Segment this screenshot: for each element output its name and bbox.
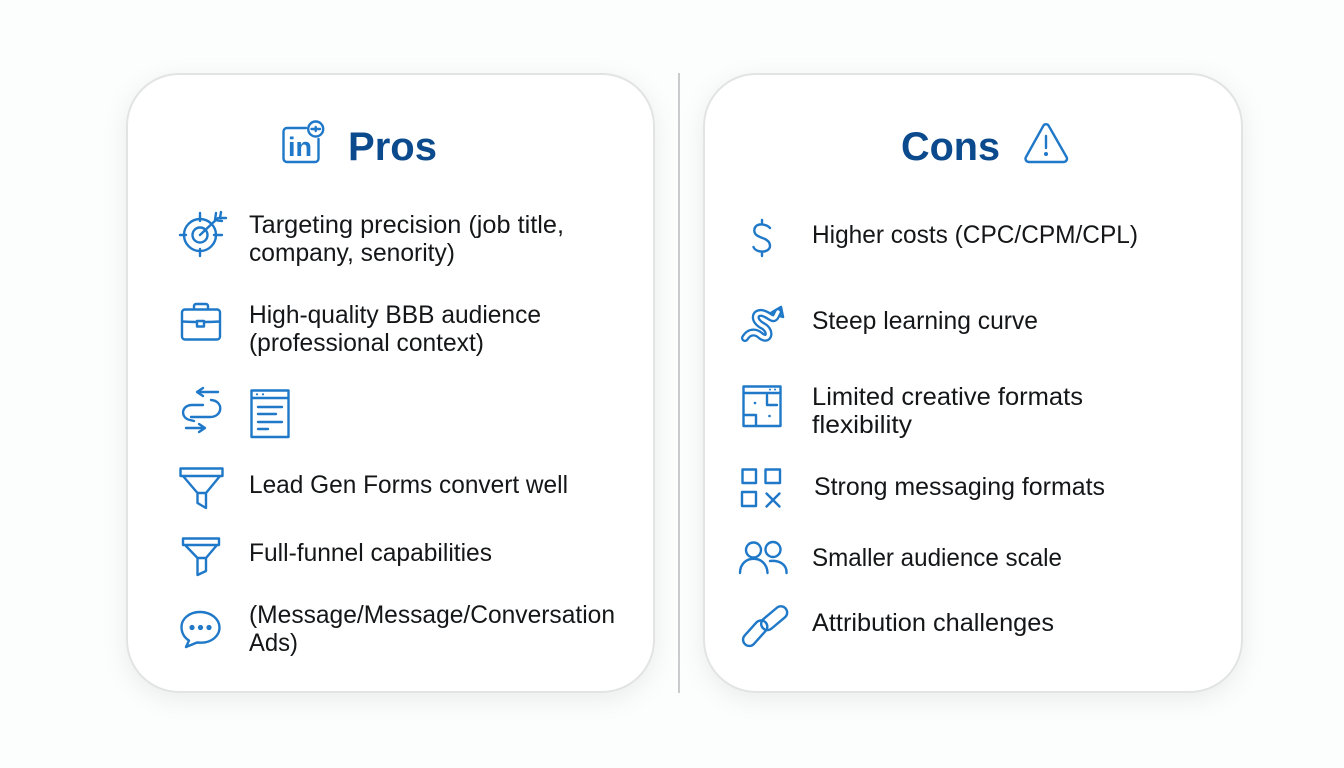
- icon: speech bubble: [182, 612, 220, 647]
- panel: cons: [704, 74, 1242, 692]
- icon: layout window: [744, 386, 780, 426]
- item: high-quality audience: (professional context): [249, 329, 484, 357]
- item: higher costs: [754, 220, 1138, 256]
- item: smaller audience scale: [740, 542, 1062, 573]
- item: steep learning curve: [745, 307, 1038, 338]
- icon: funnel large: [180, 468, 222, 508]
- text: attribution challenges: Attribution challenges: [812, 609, 1054, 637]
- text: high-quality audience: High-quality BBB audience: [249, 301, 541, 329]
- text: smaller audience scale: Smaller audience scale: [812, 544, 1062, 572]
- icon: briefcase: [182, 304, 220, 340]
- icon: chain link: [741, 604, 790, 648]
- item: limited creative formats: flexibility: [812, 411, 913, 439]
- icon: warning triangle: [1026, 124, 1067, 162]
- icon: funnel small: [183, 538, 219, 575]
- icon: people: [740, 542, 787, 573]
- center divider: [678, 73, 680, 693]
- text: higher costs: Higher costs (CPC/CPM/CPL): [812, 221, 1138, 249]
- heading: cons: Cons: [901, 125, 1000, 169]
- text: lead gen forms: Lead Gen Forms convert well: [249, 471, 568, 499]
- item: full-funnel: [183, 538, 492, 575]
- item: strong messaging formats: [742, 470, 1105, 506]
- item: targeting precision: [180, 211, 564, 267]
- item: limited creative formats: [744, 383, 1083, 439]
- text: steep learning curve: Steep learning curve: [812, 307, 1038, 335]
- item: message ads: [182, 601, 615, 657]
- text: full-funnel: Full-funnel capabilities: [249, 539, 492, 567]
- icon: winding curve: [745, 307, 783, 338]
- icon: linkedin: in: [288, 132, 312, 162]
- item: attribution challenges: [741, 604, 1054, 648]
- panel: pros: [127, 74, 654, 692]
- item: high-quality audience: [182, 301, 541, 357]
- text: limited creative formats: Limited creative formats: [812, 383, 1083, 411]
- icon: retargeting arrows: [183, 388, 220, 432]
- heading: pros: Pros: [348, 125, 437, 169]
- text: message ads: (Message/Message/Conversation: [249, 601, 615, 629]
- icon: document window: [252, 390, 288, 437]
- item: lead gen forms: [180, 468, 568, 508]
- item: targeting precision: company, senority): [249, 239, 455, 267]
- icon: target: [180, 212, 226, 256]
- item: message ads: Ads): [249, 629, 298, 657]
- icon: dollar: [754, 220, 770, 256]
- icon: grid squares: [742, 470, 780, 506]
- text: targeting precision: Targeting precision (job title,: [249, 211, 564, 239]
- icon: linkedin: [284, 122, 323, 162]
- text: strong messaging formats: Strong messaging formats: [814, 473, 1105, 501]
